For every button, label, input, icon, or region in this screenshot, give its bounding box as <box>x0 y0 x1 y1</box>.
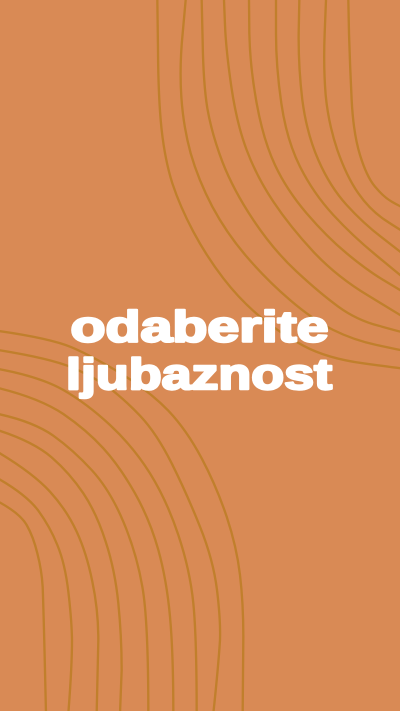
title line 2: ljubaznost <box>66 350 332 399</box>
title line 1: odaberite <box>70 302 328 352</box>
title <box>66 302 332 399</box>
contour lines: bottom left <box>0 331 243 711</box>
contour lines: top right <box>157 0 400 369</box>
